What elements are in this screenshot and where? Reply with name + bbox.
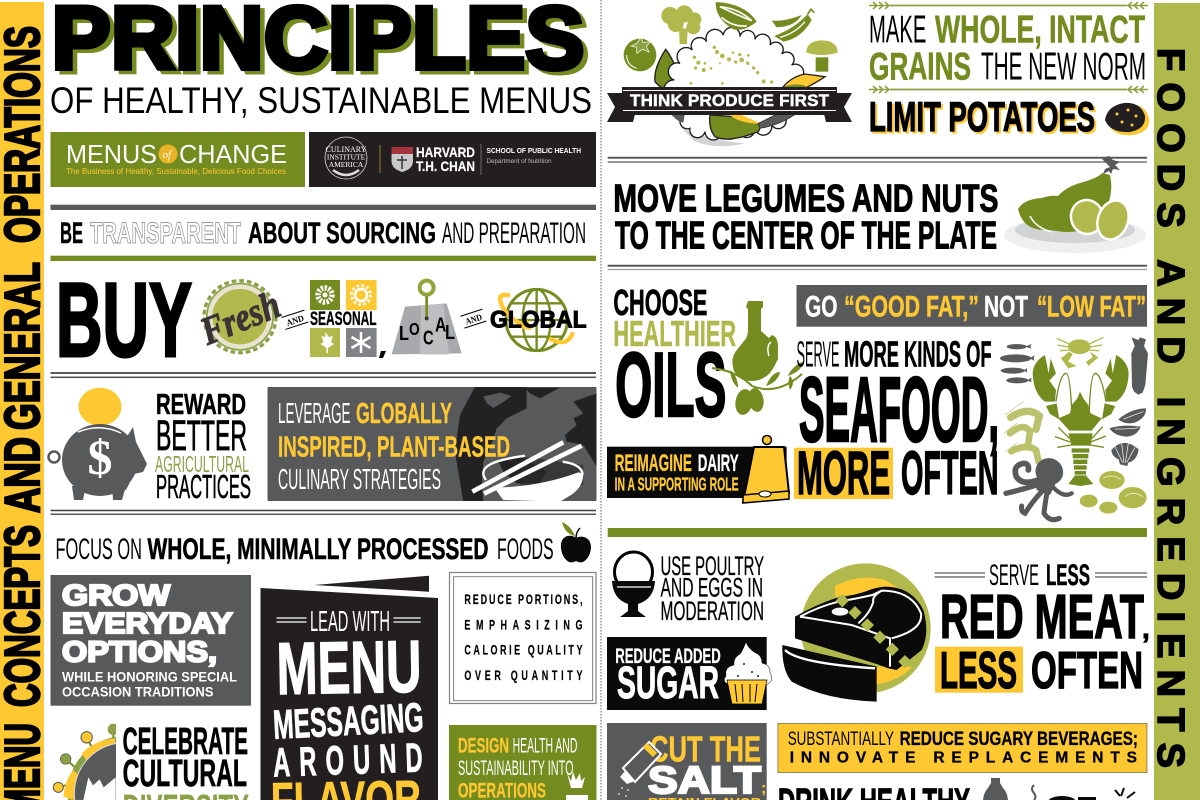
icon: cupcake (724, 642, 772, 704)
text block: reward better agricultural practices (155, 389, 251, 505)
icon: potato (1105, 103, 1149, 135)
logo panel: menus of change (50, 132, 305, 187)
panel: reduce sugary beverages: INNOVATE REPLACEMENTS (790, 750, 1137, 766)
double rule (50, 372, 596, 374)
panel: menu booklet: MESSAGING (272, 694, 425, 748)
fish (1000, 344, 1035, 383)
heading: whole intact grains (869, 2, 1148, 93)
heading: whole intact grains: MAKE (869, 9, 926, 52)
icon: seafood collection (1000, 337, 1148, 520)
icon: local map pin (392, 281, 462, 354)
text block: serve less red meat: SERVE (989, 559, 1039, 592)
panel: reduce added sugar: REDUCE ADDED (615, 645, 721, 668)
double rule (50, 510, 596, 512)
icon: steak with plate (782, 563, 931, 702)
icon: apple (561, 522, 591, 562)
shrimp (1004, 402, 1039, 462)
panel: grow everyday options: WHILE HONORING SPECIAL (62, 669, 237, 685)
panel: reduce portions: CALORIE QUALITY (464, 644, 583, 658)
right leaf (783, 74, 825, 87)
logo panel: menus of change: The Business of Healthy, Sustainable, Delicious Food Choices (66, 166, 286, 176)
logo panel: culinary institute and harvard (309, 132, 596, 187)
heading: move legumes and nuts: TO THE CENTER OF THE PLATE (615, 214, 997, 257)
logo panel: culinary institute and harvard: Department of Nutrition (486, 158, 552, 165)
panel: reduce portions: OVER QUANTITY (464, 669, 583, 684)
panel: reimagine dairy: DAIRY (698, 450, 739, 477)
heading: move legumes and nuts: MOVE LEGUMES AND NUTS (613, 178, 998, 221)
text: OFTEN (901, 439, 998, 507)
panel: grow everyday options: OPTIONS, (62, 637, 217, 669)
text block: reward better agricultural practices: PRACTICES (156, 468, 251, 505)
heading: focus on whole foods: WHOLE, MINIMALLY PROCESSED (148, 533, 488, 566)
text block: reward better agricultural practices: REWARD (156, 389, 246, 421)
text block: serve more kinds of seafood: SERVE (796, 334, 840, 375)
icon: local map pin: C (423, 326, 434, 349)
octopus (1006, 463, 1072, 520)
panel: design health into operations: HEALTH AND (513, 735, 577, 758)
panel: menu booklet: AROUND (272, 736, 423, 786)
icon: piggy bank with coin: $ (88, 429, 112, 485)
mussels (1109, 408, 1146, 437)
text block: choose healthier oils: HEALTHIER (613, 313, 736, 354)
heading: whole intact grains: GRAINS (869, 45, 971, 88)
icon: seasonal squares (310, 280, 377, 357)
icon: and flourish: AND (285, 313, 306, 328)
text block: celebrate cultural diversity (123, 721, 249, 800)
panel: reduce added sugar: SUGAR (617, 657, 719, 708)
panel: menu booklet: LEAD WITH (310, 606, 390, 638)
cucumber (772, 15, 802, 27)
text block: reward better agricultural practices: BETTER (156, 412, 247, 460)
logo panel: menus of change: of (162, 149, 173, 161)
icon: oil bottle and olive branch (712, 301, 804, 416)
panel: menu booklet (260, 576, 438, 800)
panel: leverage globally inspired: LEVERAGE (278, 398, 350, 430)
text block: serve less red meat: , (1142, 613, 1150, 644)
text block: choose healthier oils: CHOOSE (613, 282, 707, 323)
panel: leverage globally inspired: CULINARY STRATEGIES (278, 464, 441, 496)
cauliflower head (664, 27, 804, 140)
panel: design health into operations: SUSTAINABILITY INTO (458, 757, 574, 780)
panel: cut the salt: ; (761, 780, 766, 797)
icon: local map pin: L (445, 321, 455, 344)
icon: and flourish 2 (461, 309, 486, 328)
logo panel: culinary institute and harvard: T.H. CHAN (416, 158, 475, 174)
panel: good fat not low fat: “LOW FAT” (1037, 291, 1146, 324)
icon: cowbell (743, 436, 789, 503)
text block: serve less red meat (934, 559, 1150, 700)
heading: be transparent: AND PREPARATION (442, 217, 586, 250)
logo panel: culinary institute and harvard: HARVARD (416, 144, 475, 160)
text block: use poultry and eggs: MODERATION (660, 596, 764, 626)
panel: good fat not low fat (796, 285, 1147, 327)
icon: local map pin: A (435, 315, 446, 337)
panel: reimagine dairy (607, 447, 787, 498)
text block: serve more kinds of seafood: MORE (797, 439, 890, 507)
panel: reduce sugary beverages: REDUCE SUGARY BEVERAGES; (900, 729, 1138, 750)
panel: good fat not low fat: NOT (984, 291, 1028, 324)
graphic: globe and bowl (455, 387, 597, 502)
icons: fresh, seasonal, local, global row (193, 280, 587, 358)
wheat divider top (869, 2, 1148, 9)
comma (379, 351, 386, 358)
icon: egg in cup (612, 552, 655, 617)
panel: design health into operations: DESIGN (458, 735, 509, 758)
logo panel: menus of change: MENUS (66, 139, 157, 169)
text block: serve more kinds of seafood: MORE KINDS OF (844, 334, 992, 375)
text block: use poultry and eggs: AND EGGS IN (660, 573, 763, 603)
icon: cultural diversity globe (52, 724, 116, 800)
icon: global (490, 289, 587, 351)
heading: focus on whole foods: FOODS (497, 533, 554, 566)
sidebar: menu concepts and general operations (0, 2, 50, 800)
heading: limit potatoes (869, 93, 1097, 142)
heading: buy: BUY (56, 262, 192, 379)
icon: piggy bank with coin (48, 388, 147, 500)
panel: leverage globally inspired: GLOBALLY (356, 398, 452, 430)
icon: global: GLOBAL (490, 307, 587, 334)
panel: leverage globally inspired (268, 387, 597, 502)
icon: drink bottle and cups (983, 778, 1135, 800)
icon: salt shaker (618, 742, 661, 797)
mushroom (806, 40, 838, 55)
icon: and flourish 2: AND (464, 312, 484, 327)
icon: vegetables around produce banner (624, 2, 838, 146)
heading: be transparent: TRANSPARENT (90, 217, 241, 250)
panel: reduce portions: REDUCE PORTIONS, (464, 593, 582, 608)
panel: reimagine dairy: IN A SUPPORTING ROLE (615, 475, 739, 495)
icon: and flourish (282, 310, 308, 329)
text block: celebrate cultural diversity: CELEBRATE (123, 721, 248, 763)
crab (1057, 337, 1103, 368)
panel: reduce portions: EMPHASIZING (464, 619, 583, 633)
squid (1131, 337, 1148, 395)
scallop (1111, 443, 1139, 466)
panel: good fat not low fat: “GOOD FAT,” (844, 291, 979, 324)
panel: leverage globally inspired: INSPIRED, PLANT-BASED (278, 432, 510, 464)
panel: reimagine dairy: REIMAGINE (615, 450, 692, 477)
pea pod (716, 2, 757, 30)
text block: use poultry and eggs (660, 551, 764, 626)
lobster (1033, 355, 1129, 486)
tomato (624, 39, 656, 71)
panel: design health into operations (449, 725, 596, 800)
sidebar: foods and ingredients: FOODS AND INGREDIENTS (1149, 48, 1191, 768)
text block: use poultry and eggs: USE POULTRY (660, 551, 764, 581)
icon: fresh bottle cap: Fresh (193, 282, 286, 354)
text block: serve less red meat: LESS (940, 642, 1017, 700)
banner: think produce first (607, 87, 852, 122)
logo panel: culinary institute and harvard: CULINARY (326, 145, 367, 154)
heading: focus on whole foods (56, 533, 554, 566)
banner: think produce first: THINK PRODUCE FIRST (630, 91, 830, 110)
text block: choose healthier oils: OILS (615, 335, 726, 436)
heading: be transparent (60, 217, 586, 250)
double rule (608, 265, 1147, 267)
icon: local map pin: L (399, 322, 409, 345)
heading: focus on whole foods: FOCUS ON (56, 533, 142, 566)
column divider (600, 0, 602, 800)
panel: cut the salt (607, 723, 767, 800)
leaf left (655, 49, 678, 90)
panel: cut the salt: CUT THE (650, 729, 761, 770)
panel: grow everyday options: EVERYDAY (62, 608, 233, 640)
broccoli (661, 5, 701, 44)
panel: reduce portions (450, 572, 596, 704)
panel: menu booklet: MENU (276, 625, 422, 710)
wheat divider bottom (869, 86, 1148, 93)
logo panel: culinary institute and harvard: SCHOOL OF PUBLIC HEALTH (486, 148, 581, 155)
panel: good fat not low fat: GO (805, 291, 838, 324)
icon: legumes on plate (1004, 156, 1146, 253)
panel: reduce added sugar (607, 637, 767, 710)
double rule (608, 157, 1147, 159)
panel: grow everyday options: GROW (62, 580, 171, 612)
logo panel: menus of change: CHANGE (179, 139, 287, 169)
heading: be transparent: ABOUT SOURCING (248, 217, 436, 250)
divider bar olive (50, 256, 596, 261)
clams (1080, 471, 1147, 514)
icon: seasonal squares: SEASONAL (310, 309, 377, 330)
icon: local map pin: O (409, 319, 420, 339)
text block: serve more kinds of seafood (794, 334, 999, 507)
panel: reduce sugary beverages (778, 724, 1147, 772)
text block: serve less red meat: LESS (1046, 559, 1090, 592)
subtitle: OF HEALTHY, SUSTAINABLE MENUS (50, 80, 592, 121)
text block: choose healthier oils (613, 282, 736, 436)
panel: reduce sugary beverages: SUBSTANTIALLY (788, 729, 894, 750)
text block: reward better agricultural practices: AGRICULTURAL (155, 451, 249, 477)
logo panel: culinary institute and harvard: INSTITUTE (327, 152, 366, 162)
cauliflower speckle (690, 46, 773, 85)
bottom leaves (710, 115, 762, 139)
panel: grow everyday options (50, 575, 251, 706)
heading: be transparent: BE (60, 217, 83, 250)
divider bar gray (50, 205, 596, 210)
text block: celebrate cultural diversity: CULTURAL (123, 753, 247, 795)
divider bar olive (608, 528, 1147, 537)
heading: move legumes and nuts (613, 178, 998, 257)
panel: grow everyday options: OCCASION TRADITIONS (62, 683, 213, 699)
logo panel: culinary institute and harvard: AMERICA (329, 160, 364, 169)
